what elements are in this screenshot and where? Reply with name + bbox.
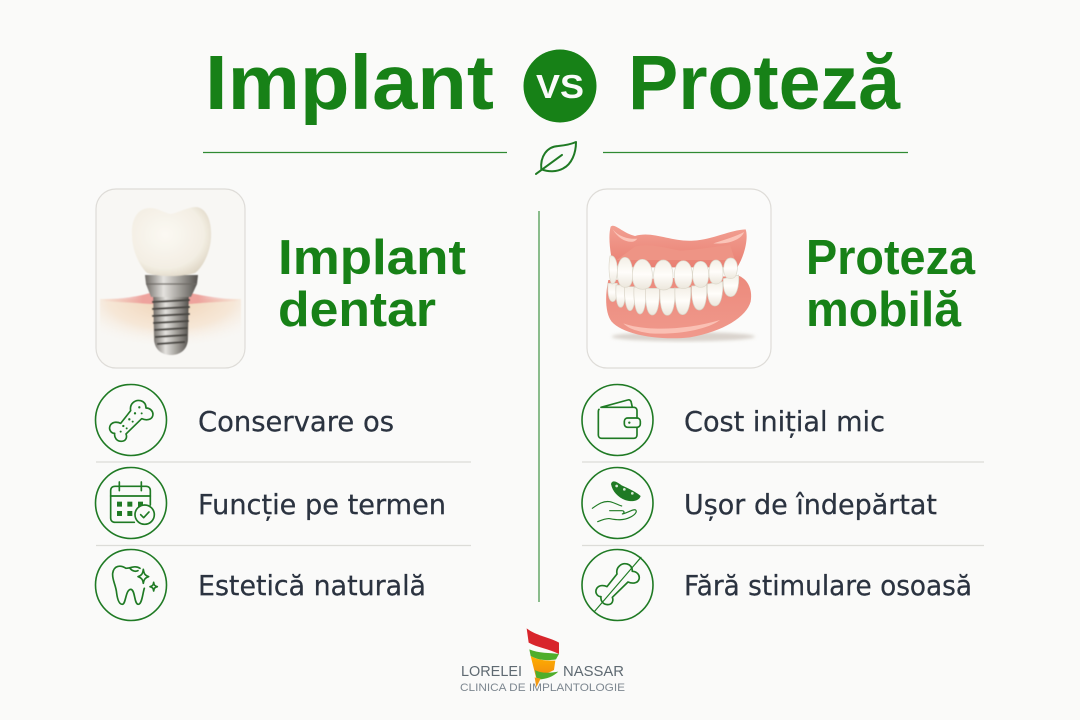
label: Cost inițial mic bbox=[684, 406, 885, 438]
title word: Implant: Implant bbox=[205, 40, 494, 126]
icon: wallet bbox=[598, 400, 640, 438]
center vertical divider bbox=[538, 211, 540, 602]
panel: implant dentar bbox=[96, 189, 471, 620]
heading: Proteza mobilă bbox=[806, 231, 976, 337]
icon: calendar with check bbox=[111, 482, 154, 524]
collar bbox=[145, 275, 198, 297]
icon: leaf bbox=[536, 142, 576, 174]
image card: dental implant bbox=[96, 189, 245, 368]
logo text: LORELEI bbox=[461, 663, 522, 680]
lower gum bbox=[606, 276, 751, 338]
logo: Lorelei Nassar: CLINICA DE IMPLANTOLOGIE bbox=[460, 682, 625, 694]
row: Ușor de îndepărtat bbox=[582, 468, 937, 538]
heading: Implant dentar bbox=[278, 231, 466, 337]
row: Funcție pe termen bbox=[96, 468, 446, 538]
icon: tooth with sparkles bbox=[113, 566, 157, 604]
lower teeth bbox=[608, 275, 739, 315]
label: Fără stimulare osoasă bbox=[684, 570, 972, 602]
row: Conservare os bbox=[96, 384, 394, 456]
heading: Implant dentar: dentar bbox=[278, 283, 436, 337]
heading: Proteza mobilă: Proteza bbox=[806, 231, 976, 285]
title word: Proteză: Proteză bbox=[628, 40, 901, 126]
label: Estetică naturală bbox=[198, 570, 426, 602]
row: Estetică naturală bbox=[96, 550, 426, 620]
image card: dentures bbox=[587, 189, 771, 368]
logo: Lorelei Nassar bbox=[460, 628, 625, 694]
panel: proteza mobila bbox=[582, 189, 984, 620]
shadow bbox=[612, 332, 755, 341]
icon: hand holding denture bbox=[592, 481, 641, 522]
label: Ușor de îndepărtat bbox=[684, 489, 937, 521]
icon: bone bbox=[110, 400, 153, 441]
divider with leaf bbox=[203, 142, 908, 174]
icon: crossed-out bone bbox=[594, 557, 641, 612]
vs badge: VS bbox=[536, 68, 584, 105]
threads bbox=[152, 292, 190, 355]
vs badge bbox=[524, 50, 596, 122]
row: Fără stimulare osoasă bbox=[582, 550, 972, 620]
logo: Lorelei Nassar: NASSAR bbox=[563, 663, 624, 680]
upper teeth bbox=[609, 256, 737, 290]
bone and gum bbox=[100, 299, 241, 365]
upper gum bbox=[609, 226, 747, 267]
crown bbox=[132, 207, 211, 276]
heading: Implant dentar: Implant bbox=[278, 231, 466, 285]
logo ribbon bbox=[527, 628, 559, 687]
heading: Proteza mobilă: mobilă bbox=[806, 283, 962, 337]
row: Cost inițial mic bbox=[582, 384, 885, 456]
title bbox=[205, 40, 901, 126]
label: Funcție pe termen bbox=[198, 489, 446, 521]
label: Conservare os bbox=[198, 406, 394, 438]
